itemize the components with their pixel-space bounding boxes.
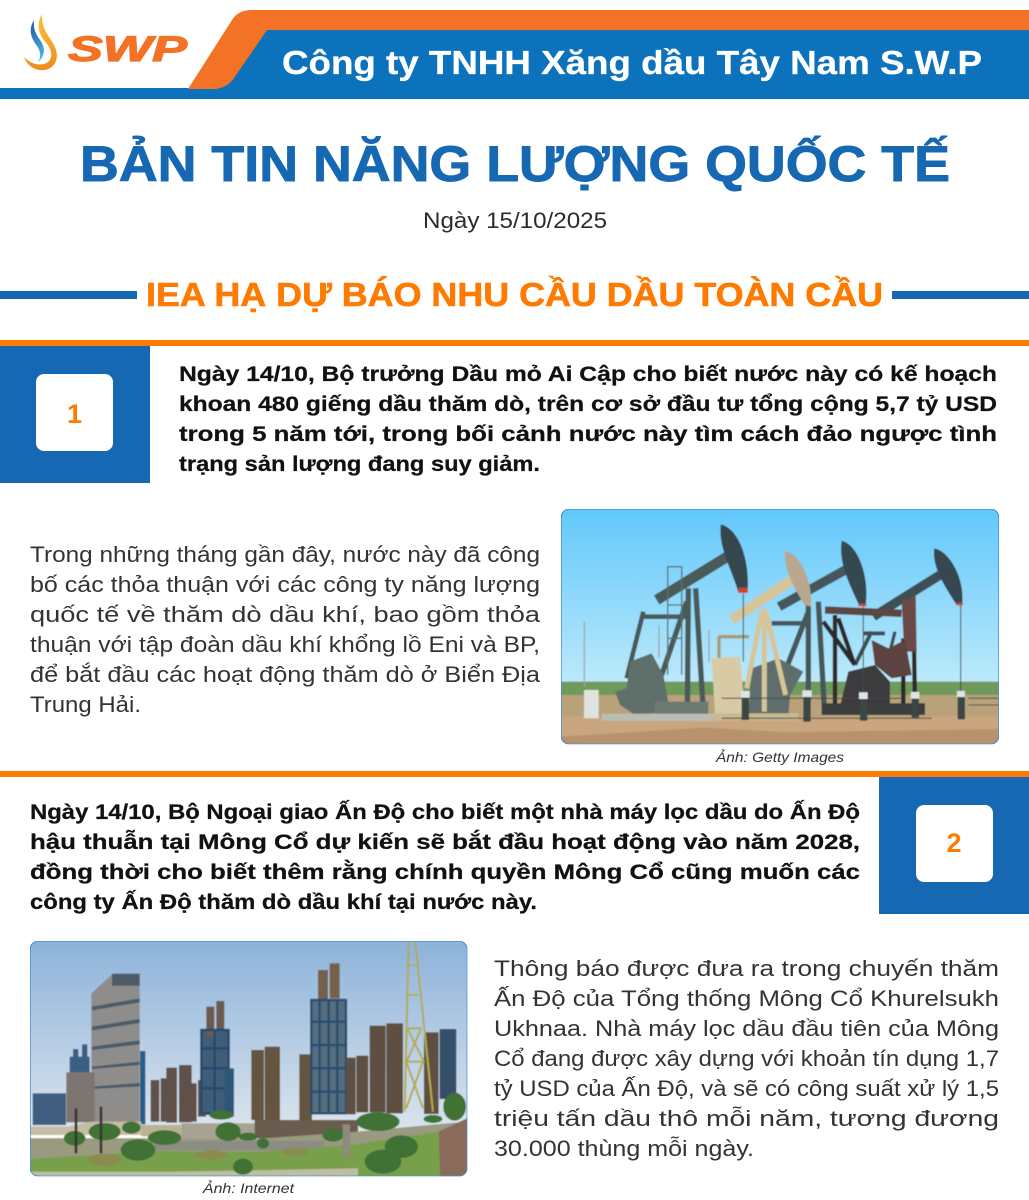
pumpjack 1 [627, 555, 730, 712]
text block: item 2 body: 30.000 thùng mỗi ngày. [494, 1136, 754, 1161]
text block: item 1 body [30, 542, 541, 717]
light poles [584, 622, 709, 687]
section heading: IEA HẠ DỰ BÁO NHU CẦU DẦU TOÀN CẦU [146, 276, 883, 313]
section heading [0, 276, 1029, 313]
logo wordmark: SWP [68, 30, 188, 69]
lead text 2: Ngày 14/10, Bộ Ngoại giao Ấn Độ cho biết một nhà máy lọc dầu do Ấn Độ [30, 799, 860, 824]
text block: item 1 body: Trung Hải. [30, 692, 141, 717]
text block: item 1 body: bố các thỏa thuận với các công ty năng lượng [30, 572, 540, 597]
lead text 1: khoan 480 giếng dầu thăm dò, trên cơ sở đầu tư tổng cộng 5,7 tỷ USD [179, 392, 997, 416]
lead text 2: đồng thời cho biết thêm rằng chính quyền Mông Cổ cũng muốn các [30, 859, 860, 884]
columns group A [151, 1065, 206, 1123]
lead text 2: hậu thuẫn tại Mông Cổ dự kiến sẽ bắt đầu hoạt động vào năm 2028, [30, 829, 860, 854]
rods and wellheads [722, 593, 999, 718]
number badge 2 [879, 777, 1029, 914]
text block: item 2 body: Ấn Độ của Tổng thống Mông Cổ Khurelsukh [494, 986, 999, 1011]
pumpjack 2 cream [748, 658, 803, 717]
text block: item 1 body: quốc tế về thăm dò dầu khí, bao gồm thỏa [30, 602, 541, 627]
company name: Công ty TNHH Xăng dầu Tây Nam S.W.P [282, 44, 982, 81]
logo: SWP [24, 14, 188, 70]
text block: item 1 body: Trong những tháng gần đây, nước này đã công [30, 542, 540, 567]
ground and vegetation [30, 1122, 458, 1160]
title: BẢN TIN NĂNG LƯỢNG QUỐC TẾ [80, 135, 950, 192]
tall concrete tower [91, 974, 140, 1125]
pumpjack 3 back [772, 568, 848, 708]
low buildings [30, 1122, 141, 1135]
number badge 2: 2 [946, 828, 962, 858]
lead text 2: công ty Ấn Độ thăm dò dầu khí tại nước này. [30, 889, 537, 914]
lead text 1: trạng sản lượng đang suy giảm. [179, 452, 540, 476]
number badge 1: 1 [67, 399, 82, 429]
text block: item 2 body: Thông báo được đưa ra trong chuyến thăm [494, 956, 999, 981]
lead text 1 [179, 362, 997, 476]
yellow lattice mast [405, 942, 433, 1112]
caption: Getty Images: Ảnh: Getty Images [715, 748, 844, 765]
caption: Internet: Ảnh: Internet [202, 1179, 295, 1196]
header banner [0, 10, 1029, 99]
lead text 2 [30, 799, 860, 914]
lead text 1: trong 5 năm tới, trong bối cảnh nước này tìm cách đảo ngược tình [179, 422, 997, 446]
text block: item 2 body: triệu tấn dầu thô mỗi năm, tương đương [494, 1106, 999, 1131]
text block: item 2 body: Ukhnaa. Nhà máy lọc dầu đầu tiên của Mông [494, 1016, 999, 1041]
text block: item 1 body: thuận với tập đoàn dầu khí khổng lồ Eni và BP, [30, 632, 540, 657]
pumpjack 4 back [855, 575, 940, 665]
panel: item 1 lead [0, 340, 1029, 483]
number badge 1 [0, 346, 150, 483]
icon: flame [24, 14, 57, 70]
photo: oil pumpjacks [561, 509, 999, 744]
text block: item 1 body: để bắt đầu các hoạt động thăm dò ở Biển Địa [30, 662, 541, 687]
text block: item 2 body [494, 956, 999, 1161]
photo: refinery [30, 941, 468, 1176]
pumpjack 4 brown front [823, 598, 915, 708]
text block: item 2 body: tỷ USD của Ấn Độ, và sẽ có công suất xử lý 1,5 [494, 1076, 999, 1101]
columns group B [251, 1047, 312, 1121]
date: Ngày 15/10/2025 [423, 208, 607, 233]
text block: item 2 body: Cổ đang được xây dựng với khoản tín dụng 1,7 [494, 1046, 999, 1071]
panel: item 2 lead [0, 771, 1029, 914]
lead text 1: Ngày 14/10, Bộ trưởng Dầu mỏ Ai Cập cho biết nước này có kế hoạch [179, 362, 997, 386]
